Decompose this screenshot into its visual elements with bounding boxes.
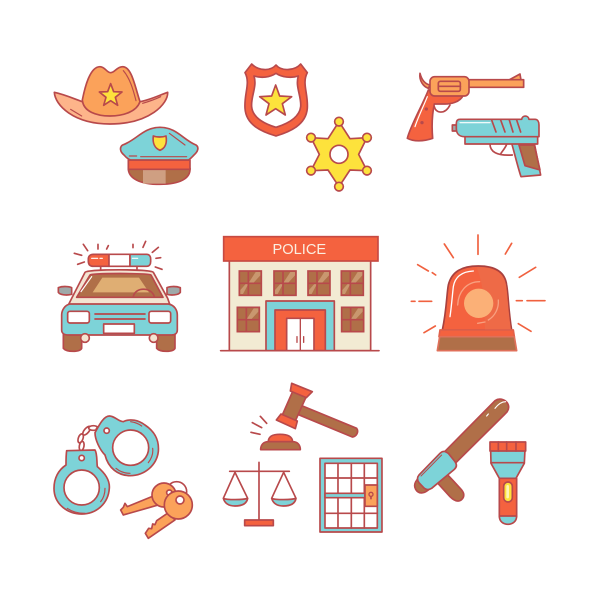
sign: police: POLICE (272, 242, 326, 258)
sign: police (224, 237, 378, 261)
icon: pistol (452, 116, 541, 177)
icon: revolver (407, 73, 524, 141)
icon: keys (121, 482, 192, 538)
icon: cowboy hat (54, 67, 168, 124)
icon: police cap (121, 127, 198, 184)
icon: gavel (251, 383, 358, 450)
icon: jail cell door (320, 458, 382, 532)
icon: police baton (415, 399, 509, 501)
icon: handcuffs (54, 416, 158, 514)
icon: scales of justice (223, 462, 296, 526)
icon: shield badge (245, 64, 307, 136)
icon: sheriff star (307, 117, 371, 191)
icon: flashing siren (411, 235, 545, 351)
icon: police car (58, 241, 180, 351)
icon: flashlight (490, 442, 526, 524)
icon: police station building (221, 237, 379, 351)
